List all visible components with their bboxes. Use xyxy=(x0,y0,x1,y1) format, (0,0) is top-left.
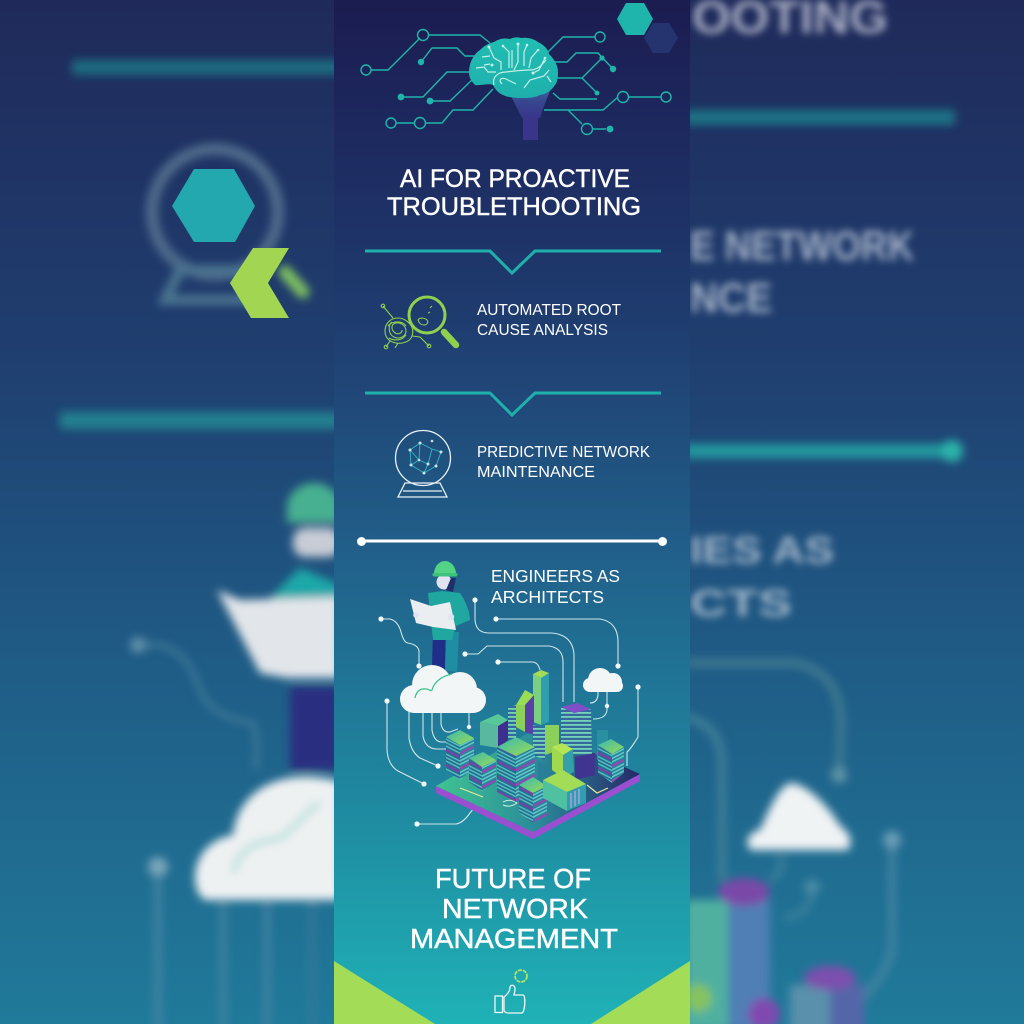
heading: future of network management: MANAGEMENT xyxy=(410,923,618,954)
blurred backdrop: right side xyxy=(684,110,963,1024)
text: engineers as architects xyxy=(491,566,620,607)
icon: thumbs up xyxy=(495,970,527,1013)
tower: centre xyxy=(497,737,535,802)
title: AI FOR PROACTIVE xyxy=(400,165,630,193)
icon: magnifying glass over tangle xyxy=(381,297,456,349)
icon: big cloud xyxy=(400,665,486,713)
hexagons top xyxy=(617,3,678,53)
blurred backdrop text: IES AS xyxy=(690,530,834,572)
text: automated root cause analysis: AUTOMATED ROOT xyxy=(477,302,622,319)
divider 1 xyxy=(365,251,661,273)
tower: front xyxy=(519,777,547,823)
footer triangles xyxy=(334,961,690,1024)
central panel xyxy=(334,0,690,1024)
illustration: engineer on cloud xyxy=(410,561,470,672)
blurred backdrop text: CTS xyxy=(690,583,792,625)
illustration: network wires xyxy=(378,597,641,827)
heading: future of network management: NETWORK xyxy=(442,893,589,924)
title xyxy=(387,165,641,221)
divider 2 xyxy=(365,393,661,415)
low green building xyxy=(543,770,586,811)
tower: right xyxy=(598,739,624,783)
blurred backdrop text: E NETWORK xyxy=(690,222,914,269)
text: engineers as architects: ENGINEERS AS xyxy=(491,566,620,586)
text: engineers as architects: ARCHITECTS xyxy=(491,587,604,607)
text: predictive network maintenance xyxy=(477,444,651,481)
heading: future of network management: FUTURE OF xyxy=(435,863,591,894)
text: automated root cause analysis: CAUSE ANALYSIS xyxy=(477,322,608,339)
chevron accent xyxy=(230,248,289,318)
heading: future of network management xyxy=(410,863,618,954)
icon: crystal ball network xyxy=(396,430,450,497)
blurred backdrop: left side xyxy=(60,60,342,1024)
title: TROUBLETHOOTING xyxy=(387,193,641,221)
icon: small cloud xyxy=(583,668,623,692)
text: automated root cause analysis xyxy=(477,302,622,339)
hexagon accent xyxy=(172,169,255,242)
blurred backdrop text: NCE xyxy=(690,274,772,321)
text: predictive network maintenance: MAINTENANCE xyxy=(477,464,595,481)
blurred backdrop text xyxy=(690,0,914,625)
text: predictive network maintenance: PREDICTIVE NETWORK xyxy=(477,444,651,461)
white divider xyxy=(357,537,667,546)
tower: left xyxy=(446,730,474,780)
tower: short xyxy=(469,752,496,791)
icon: brain with circuits xyxy=(361,30,671,140)
illustration: isometric city xyxy=(436,670,640,839)
